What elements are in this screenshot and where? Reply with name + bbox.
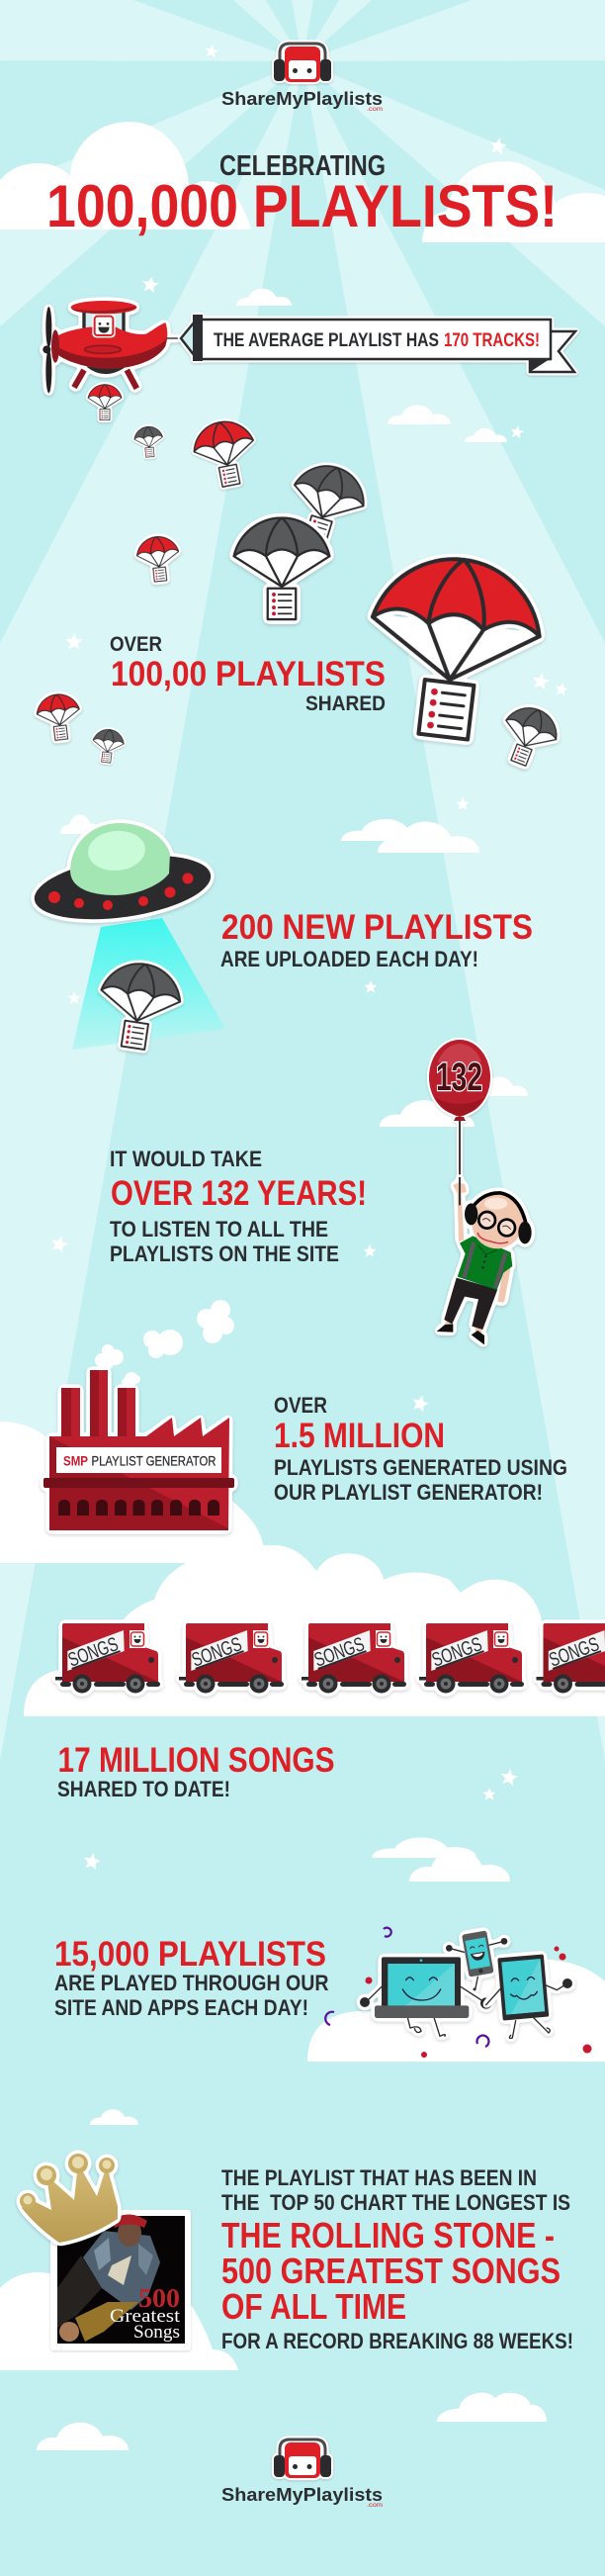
caption line one: ARE PLAYED THROUGH OUR — [54, 1971, 329, 1995]
logo wordmark: ShareMyPlaylists — [221, 88, 383, 109]
stat caption: ARE UPLOADED EACH DAY! — [220, 947, 478, 971]
album artwork — [57, 2214, 185, 2344]
factory building — [43, 1370, 234, 1530]
small cloud near plane — [236, 289, 292, 306]
balloon number: 132 — [436, 1056, 482, 1099]
icon: delivery truck 4: SONGS — [429, 1633, 485, 1672]
stat figure: 17 MILLION SONGS — [57, 1741, 334, 1780]
icon: tablet character — [486, 1954, 572, 2038]
sign text dark: PLAYLIST GENERATOR — [91, 1452, 216, 1468]
big cloud behind trucks — [24, 1545, 605, 1716]
parachute: tiny grey — [133, 425, 164, 458]
big number: 100,00 PLAYLISTS — [111, 655, 386, 693]
parachute: small red — [135, 534, 182, 584]
cloud behind title, right — [422, 161, 605, 242]
icon: phone character — [446, 1930, 507, 1990]
playlist name line one: THE ROLLING STONE - — [221, 2215, 555, 2255]
cloud behind balloon — [380, 1076, 528, 1127]
caption line one: PLAYLISTS GENERATED USING — [274, 1455, 567, 1480]
logo wordmark: ShareMyPlaylists — [221, 2484, 383, 2505]
icon: delivery truck 2 — [179, 1623, 284, 1694]
lead-in: OVER — [274, 1393, 327, 1418]
shared label: SHARED — [305, 692, 386, 715]
confetti dots and curls — [325, 1928, 591, 2058]
double cloud beside UFO — [341, 819, 479, 853]
banner text: THE AVERAGE PLAYLIST HAS — [214, 329, 439, 351]
icon: delivery truck 1 — [55, 1623, 160, 1694]
parachute: grey lower right — [493, 700, 563, 773]
parachute: tiny red under plane — [88, 385, 122, 420]
icon: UFO — [31, 823, 215, 929]
parachute: grey in UFO beam — [93, 959, 185, 1054]
stat figure: 200 NEW PLAYLISTS — [221, 908, 533, 947]
factory sign board — [56, 1447, 221, 1473]
cloud behind title, left — [0, 122, 251, 230]
stat: 100,00 playlists shared — [110, 633, 386, 715]
album Songs: Songs — [133, 2322, 180, 2343]
stat figure: OVER 132 YEARS! — [111, 1174, 367, 1213]
playlist name line three: OF ALL TIME — [221, 2286, 406, 2327]
stat: 200 new playlists — [220, 908, 533, 971]
icon: delivery truck 1: SONGS — [65, 1633, 122, 1672]
footer logo — [221, 2439, 383, 2509]
cloud near top right — [465, 428, 507, 442]
icon: gold crown — [20, 2154, 118, 2243]
title line one: CELEBRATING — [219, 150, 386, 182]
balloon string — [457, 1118, 463, 1207]
factory smoke — [95, 1300, 234, 1386]
banner: average playlist tracks — [181, 315, 575, 372]
cloud behind devices — [307, 1959, 605, 2062]
cloud behind factory — [0, 1422, 264, 1563]
stat caption: SHARED TO DATE! — [57, 1777, 230, 1801]
sign text red: SMP — [63, 1452, 88, 1468]
caption line one: TO LISTEN TO ALL THE — [110, 1217, 328, 1242]
cloud left of footer — [37, 2423, 129, 2450]
stat figure: 1.5 MILLION — [274, 1417, 445, 1455]
icon: delivery truck 5 — [536, 1623, 605, 1694]
title line two: 100,000 PLAYLISTS! — [46, 173, 558, 239]
logo domain: .com — [367, 2502, 383, 2509]
cloud above banner right — [388, 405, 451, 424]
parachute: small grey lower left — [91, 728, 126, 765]
cloud top right of footer — [437, 2393, 547, 2422]
lead-in line one: THE PLAYLIST THAT HAS BEEN IN — [221, 2165, 537, 2190]
icon: headphone mascot — [274, 44, 331, 82]
album frame — [52, 2212, 189, 2348]
stat: longest charting playlist — [221, 2165, 573, 2353]
album 500: 500 — [138, 2283, 180, 2313]
cloud behind UFO — [60, 814, 102, 834]
parachute: red medium — [190, 416, 261, 491]
stat: 1.5 million — [274, 1393, 567, 1505]
album Greatest: Greatest — [110, 2306, 181, 2327]
over label: OVER — [110, 633, 162, 656]
caption line two: OUR PLAYLIST GENERATOR! — [274, 1480, 543, 1505]
icon: delivery truck 3: SONGS — [311, 1633, 368, 1672]
icon: playlist generator factory — [43, 1370, 234, 1530]
icon: delivery truck 4 — [419, 1623, 524, 1694]
decorative stars — [49, 44, 569, 1871]
icon: old man holding balloon — [437, 1177, 532, 1344]
UFO beam — [72, 918, 225, 1050]
album cover: 500 greatest songs — [52, 2212, 189, 2348]
banner ribbon — [181, 315, 575, 372]
parachute: grey large — [234, 517, 329, 619]
parachute: small red lower left — [35, 691, 83, 742]
icon: delivery truck 3 — [302, 1623, 406, 1694]
icon: red 132 balloon — [429, 1040, 490, 1207]
header logo — [221, 44, 383, 113]
icon: red biplane — [43, 301, 181, 393]
parachute: grey medium behind — [281, 457, 372, 552]
icon: delivery truck 2: SONGS — [189, 1633, 245, 1672]
stat: 132 years — [110, 1147, 367, 1266]
caption line two: SITE AND APPS EACH DAY! — [54, 1995, 308, 2020]
caption line two: PLAYLISTS ON THE SITE — [110, 1242, 339, 1266]
banner highlight: 170 TRACKS! — [444, 329, 540, 351]
lead-in: IT WOULD TAKE — [110, 1147, 262, 1171]
title — [46, 150, 558, 239]
stat figure: 15,000 PLAYLISTS — [54, 1935, 326, 1974]
icon: headphone mascot — [274, 2439, 331, 2478]
cloud behind album — [0, 2272, 238, 2370]
double cloud below trucks — [372, 1838, 510, 1882]
small cloud above album — [90, 2109, 138, 2125]
stat: 17 million songs — [57, 1741, 334, 1801]
stat: 15,000 playlists — [54, 1935, 329, 2020]
parachute: biggest red — [360, 550, 548, 747]
background sunburst rays — [0, 0, 605, 1761]
logo domain: .com — [367, 106, 383, 113]
icon: laptop character — [360, 1957, 491, 2036]
